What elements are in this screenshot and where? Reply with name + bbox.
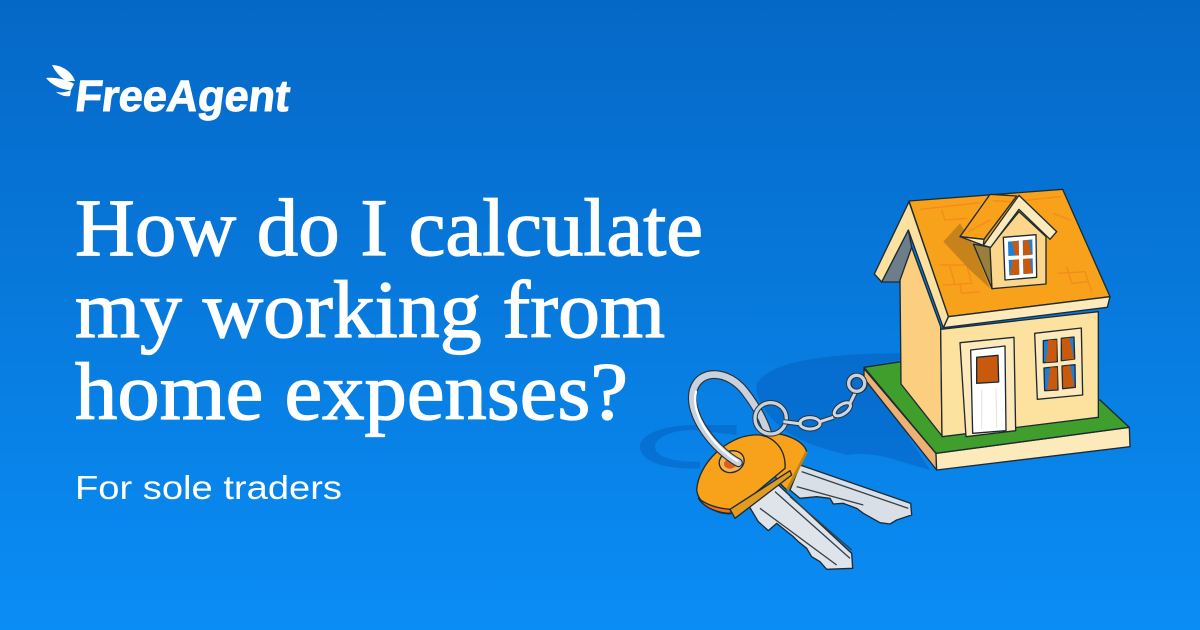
roof brick marks xyxy=(921,197,1092,293)
left wall xyxy=(900,247,942,436)
door xyxy=(960,337,1016,437)
title: my working from xyxy=(75,264,665,355)
eave xyxy=(943,297,1110,328)
subtitle: For sole traders xyxy=(75,469,342,506)
logo: FreeAgent xyxy=(46,65,293,121)
illustration: keys on chain xyxy=(640,353,930,569)
icon: back key xyxy=(763,433,912,524)
icon: key ring xyxy=(692,375,786,463)
dormer window xyxy=(1003,235,1037,280)
shadow: house and ring xyxy=(640,353,930,470)
roof xyxy=(874,189,1110,328)
title: How do I calculate xyxy=(75,182,703,273)
base slab xyxy=(864,362,1130,470)
icon: front key xyxy=(748,483,853,569)
illustration: house xyxy=(849,189,1130,470)
gable underside xyxy=(882,230,912,282)
wordmark: FreeAgent xyxy=(73,72,293,121)
front wall xyxy=(941,312,1098,437)
icon: chain anchor xyxy=(849,375,865,391)
dormer shadow xyxy=(943,223,990,288)
title: home expenses? xyxy=(75,346,628,437)
title xyxy=(75,182,703,437)
gable trim xyxy=(874,202,948,328)
icon: wing xyxy=(46,65,75,96)
dormer xyxy=(960,194,1057,289)
icon: chain xyxy=(783,375,865,429)
icon: front key head xyxy=(697,435,792,518)
front window xyxy=(1035,328,1083,399)
icon: key hole xyxy=(716,447,747,476)
